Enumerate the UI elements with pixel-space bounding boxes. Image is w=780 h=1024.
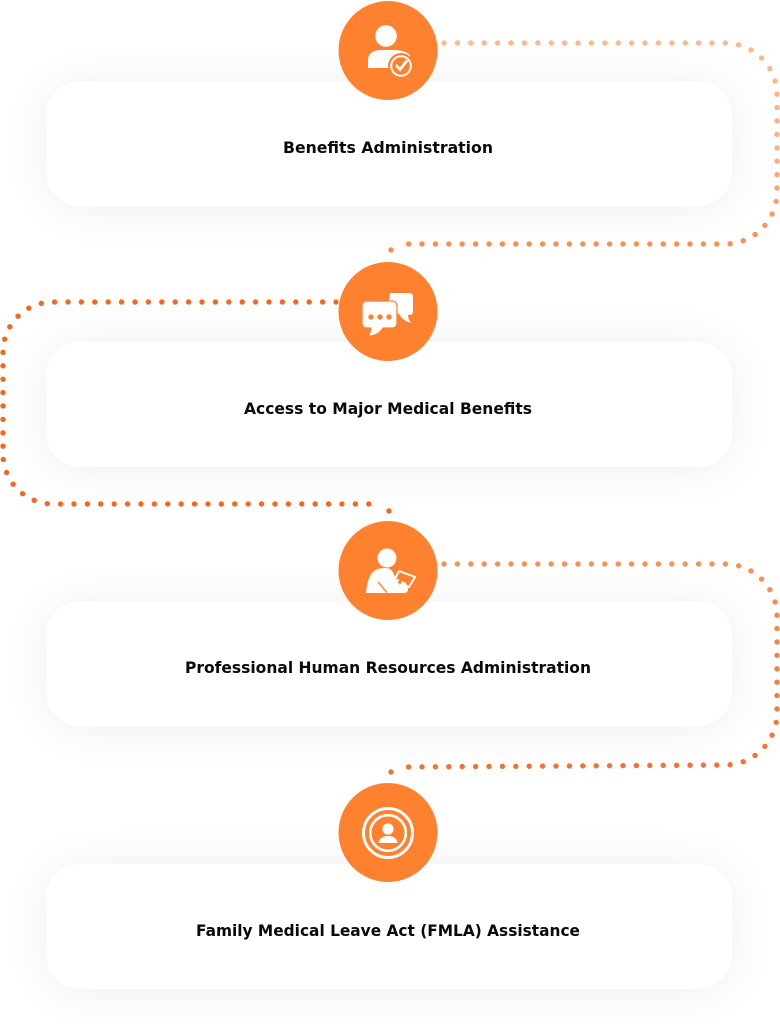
panel: Professional Human Resources Administration: Professional Human Resources Administration (185, 658, 591, 677)
icon: chat bubbles (338, 262, 438, 361)
icon: person with check badge (338, 1, 438, 100)
connector: step 1 to step 2 (388, 43, 777, 253)
panel: Access to Major Medical Benefits (46, 342, 732, 467)
icon: person in concentric circles (338, 783, 438, 882)
connector: step 2 to step 3 (3, 302, 392, 514)
icon: person reading tablet (338, 521, 438, 620)
panel: Benefits Administration: Benefits Administration (283, 138, 493, 157)
panel: Professional Human Resources Administration (46, 601, 732, 726)
panel: Access to Major Medical Benefits: Access to Major Medical Benefits (244, 399, 532, 418)
panel: Family Medical Leave Act (FMLA) Assistance: Family Medical Leave Act (FMLA) Assistance (196, 921, 580, 940)
panel: Family Medical Leave Act (FMLA) Assistance (46, 864, 732, 989)
connector: step 3 to step 4 (388, 564, 777, 775)
panel: Benefits Administration (46, 81, 732, 206)
